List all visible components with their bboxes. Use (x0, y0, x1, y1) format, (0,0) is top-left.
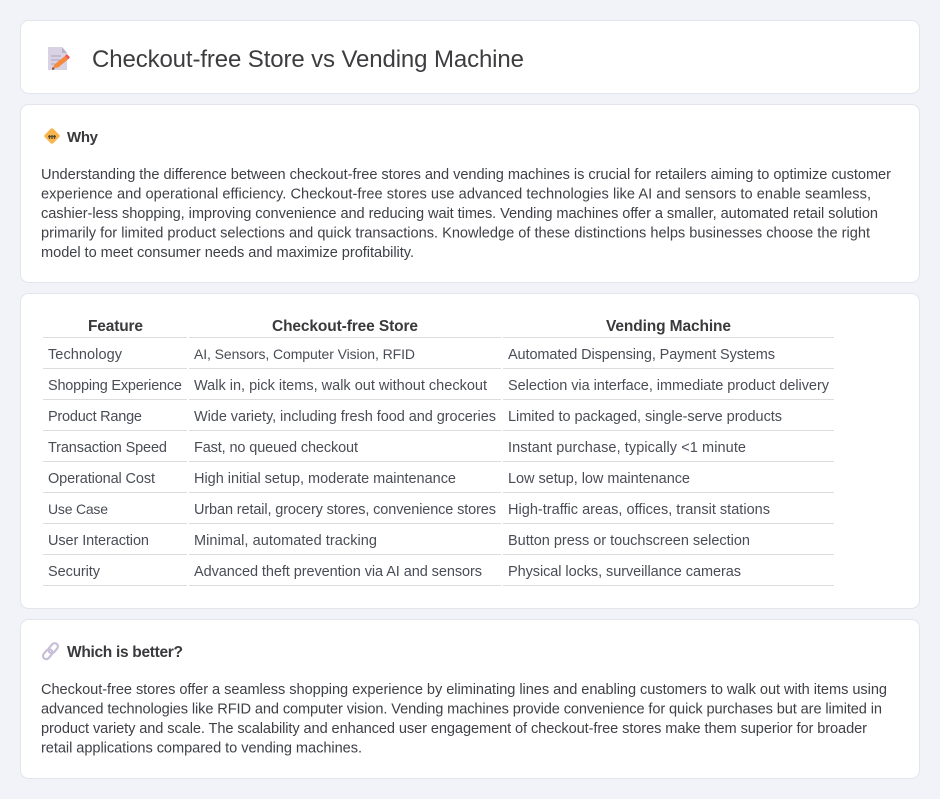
row: technology: Automated Dispensing, Payment Systems (508, 347, 775, 363)
row: use case (48, 501, 770, 518)
row: operational cost: Low setup, low maintenance (508, 471, 690, 487)
table header: Vending Machine (606, 318, 731, 335)
text block: which is better paragraph: advanced technologies like RFID and computer vision. Vending machines provide convenience for quick purchases but are limited in (41, 702, 882, 718)
row: product range: Product Range (48, 409, 142, 425)
text block: why paragraph (41, 167, 891, 261)
row: operational cost (48, 471, 690, 487)
text block: which is better paragraph (41, 682, 887, 756)
row: product range: Wide variety, including fresh food and groceries (194, 409, 496, 425)
row: security: Physical locks, surveillance cameras (508, 564, 741, 580)
text block: which is better paragraph: Checkout-free stores offer a seamless shopping experience by eliminating lines and enabling customers to walk out with items using (41, 682, 887, 698)
text block: why paragraph: experience and operational efficiency. Checkout-free stores use advanced technologies like AI and sensors to enable seamless, (41, 186, 871, 202)
row: use case: Urban retail, grocery stores, convenience stores (194, 502, 496, 518)
row: product range: Limited to packaged, single-serve products (508, 409, 782, 425)
title: Checkout-free Store vs Vending Machine (92, 46, 524, 73)
row: transaction speed: Transaction Speed (48, 440, 167, 456)
row: user interaction: User Interaction (48, 533, 149, 549)
row: technology: AI, Sensors, Computer Vision, RFID (194, 346, 415, 362)
row: use case: Use Case (48, 501, 108, 517)
row: technology (48, 346, 775, 363)
table header (88, 318, 731, 335)
table header: Checkout-free Store (272, 318, 418, 335)
row: security: Advanced theft prevention via AI and sensors (194, 564, 482, 580)
row: transaction speed: Instant purchase, typically <1 minute (508, 440, 746, 456)
row: technology: Technology (48, 347, 123, 363)
text block: why paragraph: model to meet consumer needs and maximize profitability. (41, 245, 414, 261)
text block: why paragraph: Understanding the difference between checkout-free stores and vending machines is crucial for retailers aiming to optimize customer (41, 167, 891, 183)
panel: why (20, 104, 920, 282)
text block: which is better paragraph: product variety and scale. The scalability and enhanced user engagement of checkout-free stores make them superior for broader (41, 721, 867, 737)
row: operational cost: Operational Cost (48, 471, 155, 487)
panel: title header (20, 20, 920, 94)
row: operational cost: High initial setup, moderate maintenance (194, 471, 456, 487)
row: shopping experience: Shopping Experience (48, 378, 182, 394)
heading: why: Why (67, 129, 99, 146)
icon: document with pencil (48, 47, 70, 70)
text block: why paragraph: cashier-less shopping, improving convenience and reducing wait times. Vending machines offer a smaller, automated retail solution (41, 206, 878, 222)
heading: which is better: Which is better? (67, 644, 183, 661)
row: shopping experience: Selection via interface, immediate product delivery (508, 378, 830, 394)
row: user interaction (48, 533, 750, 549)
row: security (48, 564, 741, 580)
row: shopping experience: Walk in, pick items, walk out without checkout (194, 378, 487, 394)
icon: chain link (42, 642, 59, 660)
row: security: Security (48, 564, 101, 580)
row: use case: High-traffic areas, offices, transit stations (508, 502, 770, 518)
row: shopping experience (48, 378, 830, 394)
row: transaction speed (48, 440, 746, 456)
row: user interaction: Button press or touchscreen selection (508, 533, 750, 549)
panel: which is better (20, 620, 920, 778)
table header: Feature (88, 318, 143, 335)
row: product range (48, 409, 782, 425)
text block: which is better paragraph: retail applications compared to vending machines. (41, 740, 362, 756)
row: transaction speed: Fast, no queued checkout (194, 440, 358, 456)
row: user interaction: Minimal, automated tracking (194, 533, 377, 549)
text block: why paragraph: primarily for limited product selections and quick transactions. Knowledge of these distinctions helps businesses choose the right (41, 226, 870, 242)
icon: diamond warning sign (44, 128, 60, 144)
panel: comparison table (20, 294, 920, 608)
